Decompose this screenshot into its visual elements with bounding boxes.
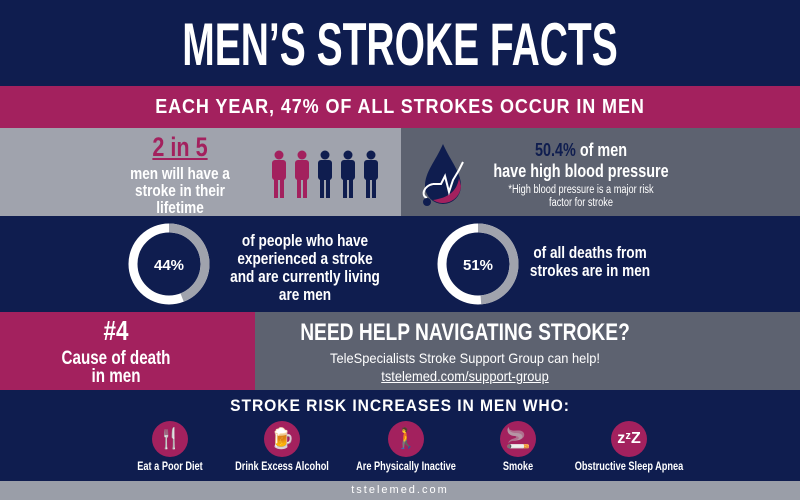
icon: alcohol: 🍺 [270,428,294,450]
text: tstelemed.com/support-group [381,368,549,384]
heading: STROKE RISK INCREASES IN MEN WHO: [230,396,570,415]
text [130,164,230,217]
labels: Drink Excess Alcohol [235,461,329,473]
labels: Obstructive Sleep Apnea [575,461,683,473]
text 51 [530,243,650,280]
icon: blood drop [422,144,464,206]
text [330,350,600,384]
panel: blood pressure [401,128,800,216]
chart: 44% donut: 44% [154,257,184,274]
text 44: are men [279,285,331,304]
text 51: strokes are in men [530,261,650,280]
text 44: of people who have [242,231,368,250]
icon: smoke [500,421,536,457]
panel: #4 cause [0,312,255,390]
icon: smoke: 🚬 [506,428,530,450]
chart: 51% donut [438,224,518,304]
stat 2 in 5: 2 in 5 [152,132,208,162]
footnote: factor for stroke [549,197,613,209]
panel: #4 cause: #4 [104,315,128,346]
banner: EACH YEAR, 47% OF ALL STROKES OCCUR IN MEN [155,96,645,118]
chart: 44% donut [128,224,210,304]
panel: donuts [0,216,800,312]
text: TeleSpecialists Stroke Support Group can help! [330,350,600,366]
icon: people [272,150,378,198]
panel: 2 in 5 [0,128,401,216]
panel: #4 cause: Cause of death [62,348,170,369]
header [0,0,800,86]
text: 50.4% of men [535,140,627,160]
text: have high blood pressure [493,161,669,181]
text: stroke in their [135,181,225,200]
labels [137,461,684,473]
icon: inactive [388,421,424,457]
text 51: of all deaths from [533,243,647,262]
icon: diet [152,421,188,457]
text [493,140,669,181]
heading: NEED HELP NAVIGATING STROKE? [300,319,630,346]
icon: sleep [611,421,647,457]
footnote: *High blood pressure is a major risk [508,184,654,196]
panel: risks [0,390,800,481]
panel: #4 cause: in men [92,366,140,387]
icon: diet: 🍴 [158,428,182,450]
footer [0,481,800,500]
labels: Eat a Poor Diet [137,461,203,473]
text 44: experienced a stroke [237,249,373,268]
footnote [508,184,654,209]
panel: help [255,312,800,390]
title: MEN’S STROKE FACTS [182,11,618,78]
chart: 51% donut: 51% [463,257,493,274]
banner [0,86,800,128]
text: men will have a [130,164,230,183]
labels: Are Physically Inactive [356,461,456,473]
text: lifetime [156,198,204,217]
text 44: and are currently living [230,267,380,286]
icon: sleep: zᶻZ [617,430,641,447]
footer: tstelemed.com [351,484,449,496]
text 44 [230,231,380,304]
icon: inactive: 🚶 [394,428,418,450]
labels: Smoke [503,461,533,473]
icon: alcohol [264,421,300,457]
